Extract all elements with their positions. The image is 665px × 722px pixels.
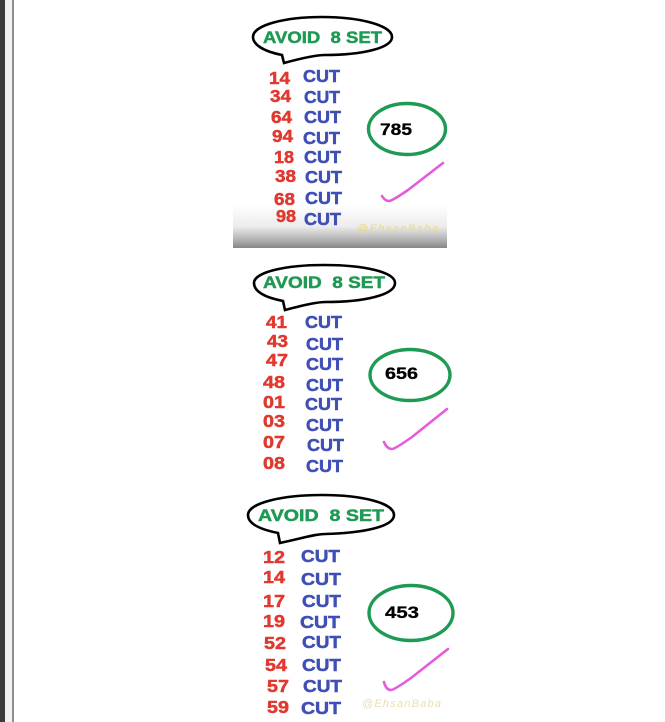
- number list: 47: [266, 350, 288, 370]
- circled result: 656: [385, 365, 418, 383]
- number list: [263, 312, 344, 476]
- number list: CUT: [306, 456, 343, 476]
- icon: check mark: [384, 409, 447, 449]
- circled result: [368, 104, 446, 154]
- number list: 17: [263, 591, 285, 611]
- grey fade band: [233, 205, 447, 248]
- speech bubble heading: [253, 17, 392, 63]
- number list: CUT: [304, 147, 341, 167]
- circled result: 785: [380, 121, 412, 139]
- icon: check mark: [384, 649, 448, 690]
- number list: 12: [263, 547, 285, 567]
- number list: 34: [270, 86, 291, 106]
- circled result: [369, 586, 453, 640]
- number list: CUT: [306, 334, 343, 354]
- panel: second set 656: [254, 265, 450, 476]
- number list: CUT: [303, 676, 342, 696]
- number list: CUT: [301, 569, 341, 589]
- number list: 52: [264, 633, 286, 653]
- number list: CUT: [305, 312, 342, 332]
- number list: 14: [269, 68, 290, 88]
- number list: 64: [271, 107, 292, 127]
- number list: 19: [263, 611, 285, 631]
- speech bubble heading: AVOID 8 SET: [258, 506, 385, 525]
- number list: CUT: [302, 655, 341, 675]
- number list: CUT: [304, 209, 341, 229]
- number list: CUT: [302, 632, 341, 652]
- number list: CUT: [301, 546, 340, 566]
- icon: check mark: [382, 163, 443, 201]
- number list: 14: [263, 567, 285, 587]
- number list: 57: [267, 676, 289, 696]
- number list: CUT: [302, 591, 341, 611]
- number list: 08: [263, 453, 285, 473]
- panel: third set 453: [248, 495, 453, 718]
- number list: CUT: [305, 188, 342, 208]
- number list: 68: [274, 189, 295, 209]
- watermark: @EhsanBaba: [357, 223, 438, 235]
- number list: CUT: [306, 375, 343, 395]
- number list: 18: [274, 147, 294, 167]
- number list: [269, 66, 342, 229]
- number list: CUT: [306, 354, 343, 374]
- circled result: [370, 350, 450, 400]
- number list: 48: [263, 372, 285, 392]
- number list: CUT: [307, 435, 344, 455]
- number list: CUT: [301, 698, 341, 718]
- number list: CUT: [306, 415, 343, 435]
- number list: [263, 546, 342, 718]
- number list: 03: [263, 411, 285, 431]
- watermark: @EhsanBaba: [362, 698, 441, 710]
- number list: CUT: [304, 87, 340, 107]
- speech bubble heading: AVOID 8 SET: [263, 28, 383, 47]
- number list: 43: [267, 331, 288, 351]
- number list: CUT: [305, 394, 342, 414]
- number list: 07: [263, 432, 285, 452]
- panel: first set 785: [233, 17, 447, 248]
- speech bubble heading: AVOID 8 SET: [263, 273, 386, 292]
- number list: 54: [265, 655, 287, 675]
- number list: CUT: [303, 128, 340, 148]
- number list: CUT: [304, 107, 341, 127]
- number list: 01: [263, 392, 285, 412]
- number list: 98: [276, 206, 296, 226]
- number list: 94: [272, 126, 293, 146]
- number list: 38: [275, 166, 296, 186]
- speech bubble heading: [248, 495, 394, 543]
- number list: 41: [266, 312, 287, 332]
- number list: CUT: [305, 167, 342, 187]
- number list: 59: [267, 697, 289, 717]
- speech bubble heading: [254, 265, 395, 310]
- circled result: 453: [385, 604, 419, 622]
- window edge strip: [0, 0, 14, 722]
- number list: CUT: [303, 66, 340, 86]
- number list: CUT: [300, 612, 340, 632]
